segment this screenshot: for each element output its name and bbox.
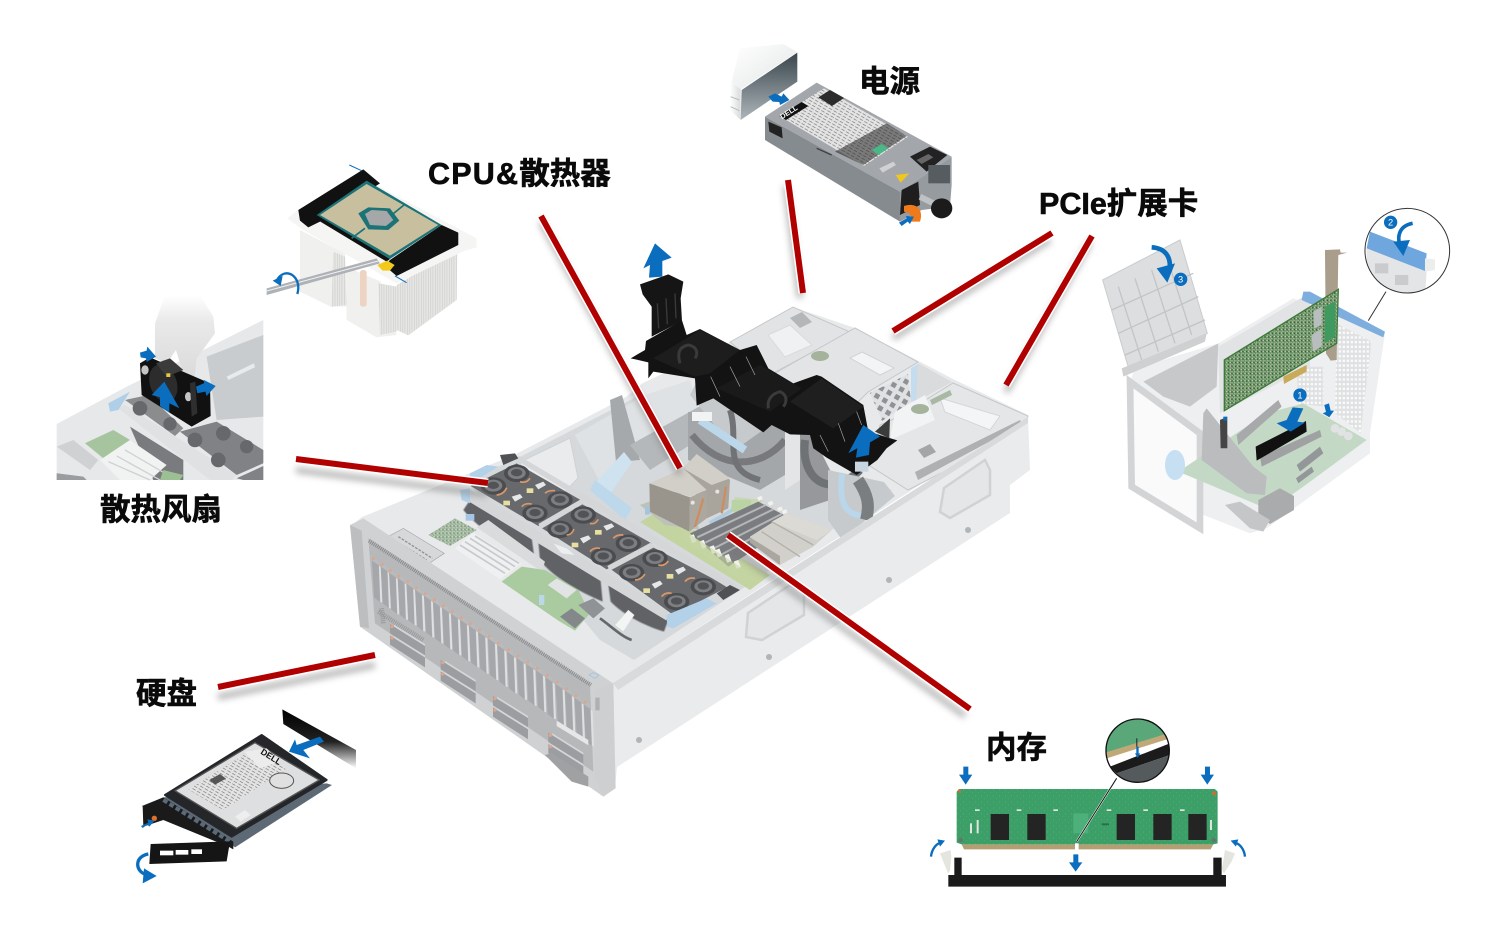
heatsink: CPU <box>645 454 751 532</box>
riser board <box>1165 400 1367 532</box>
line shadows <box>218 186 1090 716</box>
step 1 badge: 1 <box>1297 390 1303 400</box>
title: cooling fan: 散热风扇 <box>100 493 222 527</box>
cpu carrier ends <box>298 169 458 276</box>
arrow: bracket <box>1323 403 1334 417</box>
pcie card <box>1224 249 1347 411</box>
blue arrows <box>959 767 972 785</box>
panel: memory module <box>931 718 1245 887</box>
heatsink: right CPU <box>750 513 832 565</box>
shroud bracket <box>640 274 683 337</box>
step 3 badge: 3 <box>1178 275 1183 285</box>
power socket <box>910 147 947 172</box>
blue latches <box>667 598 717 628</box>
socket <box>948 858 1226 887</box>
fan openings <box>463 500 668 632</box>
step 1 badge <box>1293 388 1307 402</box>
title: power supply: 电源 <box>859 65 920 99</box>
gold fingers <box>962 844 1213 849</box>
riser cage <box>1130 297 1385 533</box>
heatsink <box>287 180 477 337</box>
panel: hard disk <box>138 709 356 883</box>
step 3 badge <box>1174 273 1187 286</box>
drive bays lower row <box>390 624 583 776</box>
panel: power supply unit <box>730 44 952 226</box>
blue accents <box>349 165 407 283</box>
callout line <box>1368 292 1386 321</box>
arrow: step 3 <box>1152 247 1170 272</box>
air shroud <box>631 243 897 475</box>
memory modules <box>683 497 797 582</box>
right side panel <box>613 417 1030 787</box>
title: memory: 内存 <box>986 731 1047 765</box>
carrier front <box>143 797 233 864</box>
disk bay opening <box>282 709 356 768</box>
front ear <box>594 683 616 797</box>
interior <box>466 395 892 660</box>
cover <box>1103 240 1207 377</box>
glove hand <box>155 295 215 384</box>
line halos <box>218 180 1092 709</box>
title: CPU & heatsink: CPU&散热器 <box>428 157 611 191</box>
callout circle <box>1365 208 1450 297</box>
panel: PCIe riser <box>1103 208 1450 533</box>
panel: fan removal <box>57 295 263 480</box>
psu label: DELL <box>778 103 800 121</box>
panel: CPU and heatsink <box>267 165 477 337</box>
title: hard disk: 硬盘 <box>136 677 197 711</box>
arrow up: bottom <box>848 425 880 458</box>
shroud body <box>631 320 897 475</box>
faded system view <box>57 320 263 480</box>
blue arrows <box>289 737 324 758</box>
fan unit <box>140 357 211 427</box>
title: PCIe card: PCIe扩展卡 <box>1039 187 1198 221</box>
motherboard strip <box>640 510 770 590</box>
step 2 badge: 2 <box>1388 218 1393 228</box>
disk label: DELL <box>259 747 284 767</box>
cooling fan bank <box>460 453 740 632</box>
psu body <box>765 83 952 192</box>
metal bar <box>467 489 667 621</box>
drive bays upper row <box>370 555 594 746</box>
memory chips <box>991 814 1207 840</box>
server chassis <box>350 307 1030 797</box>
arrow: step 1 <box>1277 407 1305 432</box>
cpu <box>317 181 442 259</box>
left wall and cable bay <box>520 380 895 540</box>
front panel with drive bays <box>350 518 616 797</box>
carrier <box>142 783 332 847</box>
callout line <box>1077 778 1117 842</box>
orange chevrons and labels <box>497 478 695 597</box>
carrier frame <box>287 180 477 283</box>
dividers <box>515 456 738 590</box>
leader lines <box>218 180 1092 716</box>
fan modules <box>471 463 728 615</box>
disk label <box>175 743 319 828</box>
rear covers <box>730 307 1028 490</box>
callout circle <box>1103 718 1170 787</box>
storage controller and board <box>385 514 634 640</box>
duct <box>730 44 797 120</box>
tool <box>267 258 380 295</box>
blue arrows <box>152 382 179 413</box>
arrow up: top <box>643 243 672 278</box>
pcb <box>957 789 1218 844</box>
red lines <box>218 180 1092 709</box>
fan and pull handle <box>928 165 950 183</box>
blue arrows <box>768 93 789 105</box>
chassis top plate <box>352 307 1028 683</box>
blue clip bar <box>1302 292 1385 337</box>
psu label <box>778 88 908 166</box>
